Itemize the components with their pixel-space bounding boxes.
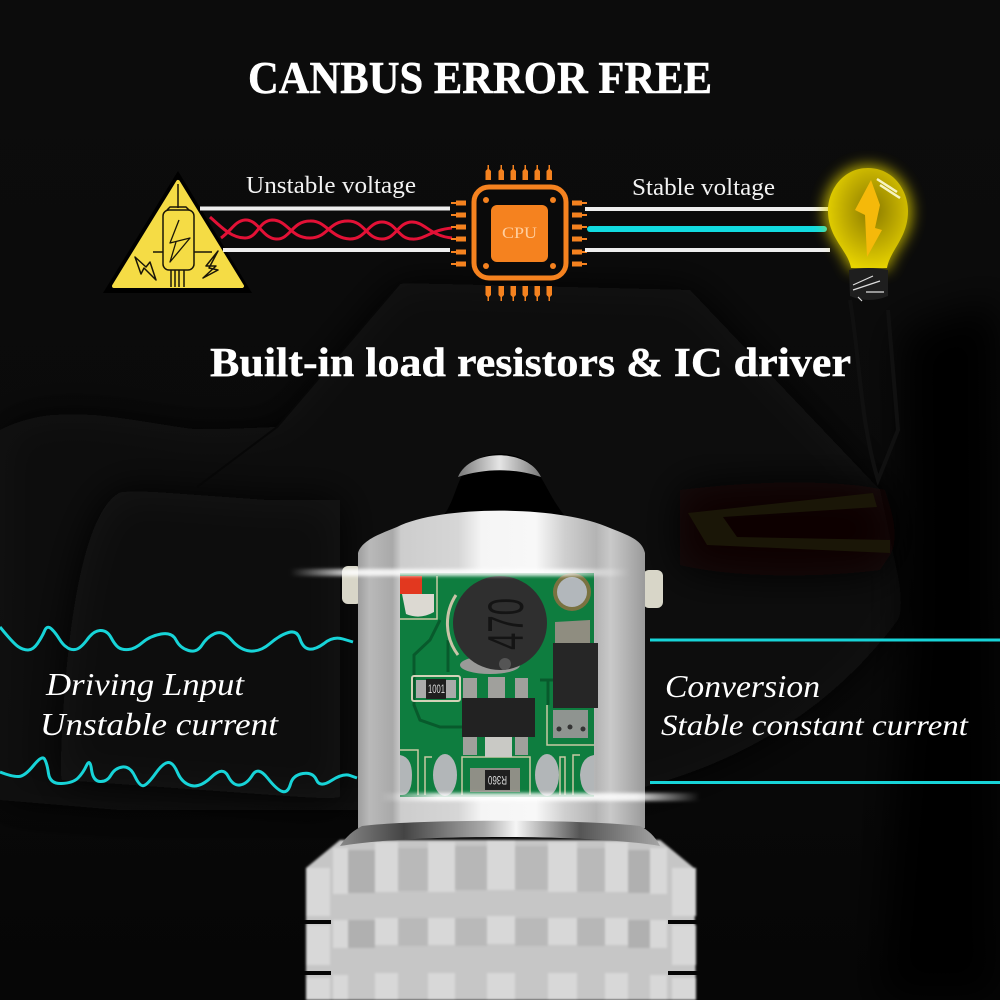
label: unstable current: Unstable current: [40, 706, 279, 742]
input waveform: lower: [0, 758, 357, 792]
icon: glowing light bulb: [824, 165, 912, 301]
solder pad lower right: [553, 710, 588, 738]
diagram: voltage conversion: [103, 165, 912, 301]
label: unstable voltage: Unstable voltage: [246, 173, 416, 199]
fin notches: [300, 920, 700, 975]
title: CANBUS ERROR FREE: [248, 52, 712, 103]
output line: lower: [650, 781, 1000, 784]
label: stable voltage: Stable voltage: [632, 175, 775, 201]
base ring: [340, 821, 660, 846]
subtitle: Built-in load resistors & IC driver: [210, 339, 851, 385]
label: conversion: Conversion: [665, 668, 820, 704]
input waveform: upper: [0, 627, 353, 651]
solder pad: [402, 594, 434, 617]
LED bulb: [290, 454, 700, 1000]
label: stable constant current: Stable constant current: [661, 709, 969, 742]
wires: stable output: [585, 207, 830, 252]
highlight glare bands: [290, 569, 700, 801]
IC chip: [462, 698, 535, 737]
circuit board: [400, 573, 598, 797]
icon: CPU chip: [451, 165, 587, 301]
solder pad top right: [553, 573, 591, 611]
wires: unstable input: [200, 206, 452, 252]
IC pins: [463, 677, 528, 757]
diode: [553, 643, 598, 708]
inductor 470: 470: [478, 598, 534, 650]
red component: [400, 576, 422, 594]
heat sink: [306, 840, 696, 1000]
metal base: [358, 511, 645, 837]
resistor R360: [470, 768, 520, 792]
resistor R360: R360: [488, 773, 507, 787]
faint car silhouette: [0, 283, 1000, 1000]
bulb tip dome: [443, 454, 565, 516]
resistor 1001: [412, 676, 460, 701]
solder pad upper right: [555, 620, 590, 645]
resistor 1001: 1001: [428, 682, 445, 696]
output line: upper: [650, 638, 1000, 642]
inductor 470: [447, 576, 547, 674]
label: driving input: Driving Lnput: [45, 666, 245, 702]
icon: warning triangle with coil: [103, 171, 252, 293]
locking pins: [342, 566, 663, 608]
solder joints bottom: [400, 754, 594, 796]
icon: CPU chip: CPU: [502, 225, 538, 242]
